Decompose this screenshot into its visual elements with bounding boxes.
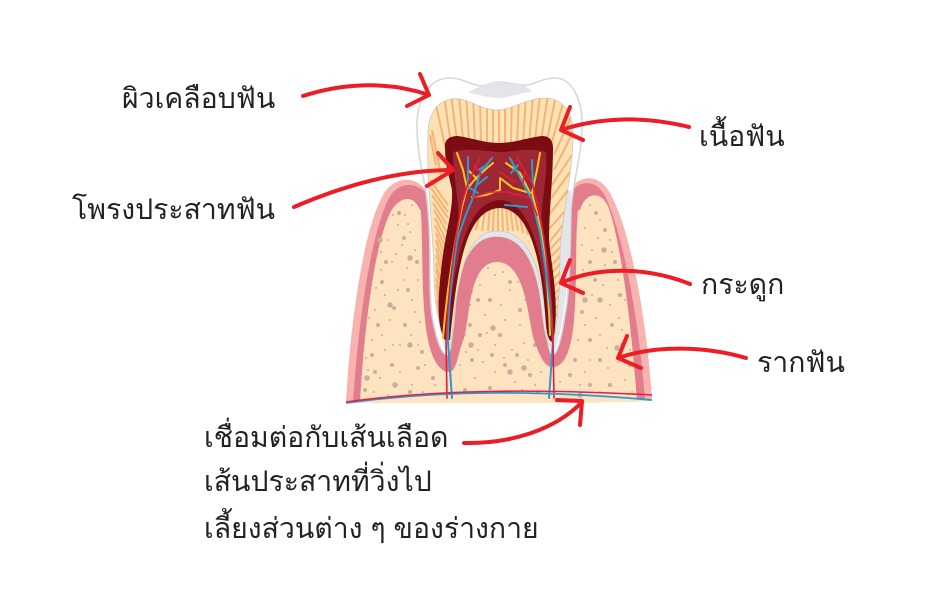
root shadow — [432, 190, 571, 355]
red base vessel — [346, 391, 652, 402]
arrow: dentin — [561, 107, 689, 140]
blue vessels — [448, 157, 553, 398]
label: root: รากฟัน — [757, 347, 845, 379]
yellow nerves — [443, 153, 550, 338]
pulp chamber inner — [447, 150, 549, 325]
vessel base lines — [346, 391, 652, 403]
label: dentin: เนื้อฟัน — [699, 116, 785, 153]
blue base vessel — [346, 393, 652, 403]
label: vessels and nerves — [204, 418, 539, 545]
gum outer layer — [346, 178, 652, 401]
arrow: bone — [561, 260, 690, 293]
label: enamel: ผิวเคลือบฟัน — [122, 83, 275, 115]
periodontal socket — [420, 195, 580, 372]
red vessels — [446, 158, 554, 398]
bone — [360, 195, 637, 402]
label: bone: กระดูก — [701, 269, 784, 302]
crown shadow — [467, 82, 532, 98]
arrow: root — [618, 336, 746, 368]
label: vessels and nerves: เชื่อมต่อกับเส้นเลือด — [204, 418, 448, 454]
bone pores — [365, 205, 632, 395]
tooth and gum diagram — [346, 78, 652, 403]
dentin — [428, 98, 573, 345]
label: vessels and nerves: เลี้ยงส่วนต่าง ๆ ของร่างกาย — [204, 508, 539, 545]
pulp chamber dark — [439, 136, 556, 342]
dentin stripes — [430, 95, 574, 335]
arrow: pulp — [294, 153, 453, 207]
label: pulp: โพรงประสาทฟัน — [72, 193, 275, 226]
label: vessels and nerves: เส้นประสาทที่วิ่งไป — [204, 462, 432, 498]
tooth enamel and root — [417, 78, 582, 355]
bone base strip — [346, 392, 652, 403]
arrow: enamel — [303, 74, 429, 106]
arrow: vessels — [464, 400, 582, 443]
gum inner layer — [353, 183, 645, 401]
nerves and vessels — [443, 153, 554, 398]
